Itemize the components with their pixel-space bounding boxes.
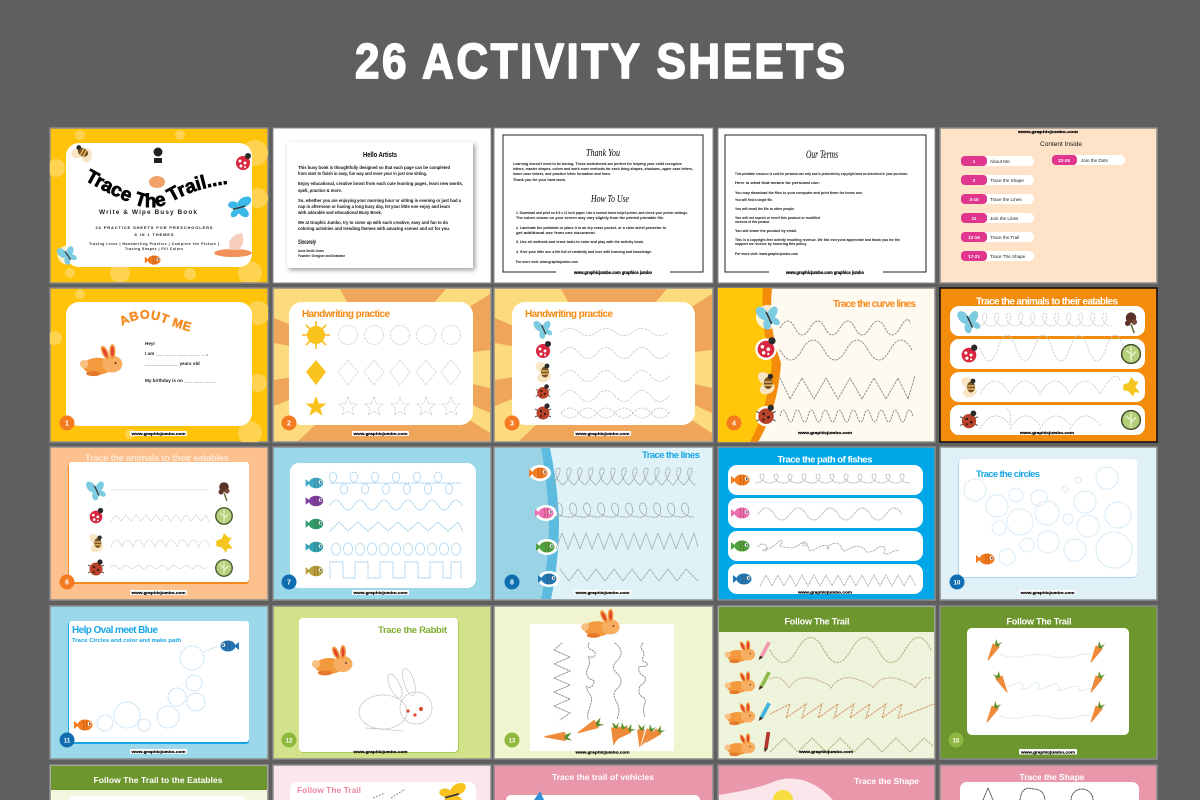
sheet 15: follow the trail carrots (940, 606, 1157, 759)
page number: 7 (287, 580, 291, 586)
heading: Follow The Trail (784, 616, 850, 626)
contents list: Trace the Lines (990, 197, 1022, 202)
thank you text: Thank you for your hard work. (513, 177, 566, 182)
footer url: www.graphicjumbo.com (352, 431, 408, 436)
letter body: from start to finish in easy, fun way and more your in just one sitting. (298, 171, 427, 176)
icon: kite (306, 360, 326, 385)
about me form: _____________ years old (144, 361, 200, 366)
contents list: Trace The Shape (990, 254, 1026, 259)
page number: 10 (954, 580, 961, 586)
footer url: www.graphicjumbo.com (352, 590, 408, 595)
sheet 6: trace animals peach (50, 447, 268, 600)
rabbit face (406, 707, 423, 717)
footer url: www.graphicjumbo.com (574, 750, 630, 754)
footer url: www.graphicjumbo.com graphics jumbo (573, 270, 652, 275)
sheet: our terms (718, 128, 935, 283)
heading: Trace the lines (642, 450, 700, 461)
vertical tracing lines (554, 643, 647, 720)
about me form (144, 341, 216, 383)
letter body: Enjoy educational, creative boost from each cute learning pages, learn new words, (298, 181, 463, 186)
letter body: Founder / Designer and Illustrator (298, 254, 346, 258)
title: 26 ACTIVITY SHEETS (355, 34, 845, 89)
icon: chick (773, 790, 793, 800)
tracing lines (770, 638, 934, 752)
page number: 1 (65, 420, 69, 428)
heading: Follow The Trail (297, 785, 361, 795)
terms text: You may download the files to your computer and print them for home use. (735, 190, 863, 195)
page number: 6 (65, 580, 69, 586)
sheet 5: trace animals orange (940, 288, 1157, 442)
footer url: www.graphicjumbo.com (130, 749, 186, 754)
about me form: I am ___ __ __ ____ __ __ __, (145, 351, 208, 356)
letter body: spell, practice & more. (298, 188, 342, 193)
page number: 12 (286, 738, 293, 744)
about me form: Hey! (145, 341, 155, 346)
sheet 12: trace the rabbit (273, 606, 491, 759)
page number (504, 416, 520, 430)
tracing lines (756, 474, 916, 586)
letter body: with adorable and educational Busy Book. (297, 210, 382, 215)
page number: 3 (510, 420, 514, 428)
fish icons (306, 475, 326, 579)
how to use text: For more visit: www.graphicjumbo.com (516, 259, 578, 264)
rows (950, 306, 1145, 435)
footer url: www.graphicjumbo.com (798, 750, 853, 754)
how to use text: 2. Laminate the printable or place it in an dry erase pocket, or a clear sheet protector to (516, 225, 667, 230)
page number (60, 416, 74, 430)
fish icons (74, 638, 239, 733)
tracing lines (552, 468, 698, 581)
contents heading: Content Inside (1040, 141, 1082, 148)
fish icon (976, 551, 998, 567)
sheet 13: rabbit to carrots (494, 606, 713, 759)
cover stickers (53, 140, 256, 268)
footer url (556, 268, 670, 276)
sheet 7: blue fish lines (273, 447, 491, 600)
sheet: trace the shape (940, 765, 1157, 800)
icon: sun (302, 321, 330, 349)
heading: Help Oval meet Blue (72, 625, 158, 636)
footer url (769, 268, 883, 276)
vehicle icon (534, 791, 544, 800)
contents list: Trace the Shape (990, 178, 1024, 183)
sheet 2: handwriting shapes (273, 288, 491, 442)
animals and food (83, 475, 233, 578)
contents list: Join the Lines (990, 216, 1019, 221)
terms heading: Our Terms (806, 149, 838, 161)
rows (728, 465, 923, 594)
cover logo (154, 148, 162, 163)
letter body: We at Graphic Jumbo, try to come up with such creative, easy and fun to do (298, 220, 448, 225)
page number (60, 732, 74, 748)
footer url: www.graphicjumbo.com (352, 749, 408, 754)
cover details: Tracing Shapes | Fill Colors (125, 247, 183, 251)
sheet 11: help oval meet blue (50, 606, 268, 759)
thank you text: letters, master shapes, colors and work more methods for each thing shapes, shadows, upper case letters, (513, 166, 693, 171)
page number: 2 (287, 420, 291, 428)
carrots (545, 712, 666, 751)
page number (282, 732, 296, 748)
sheet: hello artists (273, 128, 491, 283)
terms text: versions of this product. (735, 219, 770, 224)
sheet 9: path of fishes (718, 447, 935, 600)
icon: butterfly (437, 779, 471, 800)
sheet 3: handwriting lines (494, 288, 713, 442)
contents list: 1 (973, 159, 976, 164)
rabbit (581, 609, 620, 638)
footer url: www.graphicjumbo.com (797, 430, 853, 435)
page number: 11 (64, 738, 71, 744)
footer url: www.graphicjumbo.com (574, 431, 630, 436)
footer url: www.graphicjumbo.com (1020, 749, 1076, 754)
tracing lines (330, 472, 463, 578)
letter body (297, 165, 463, 258)
tracing shapes (338, 326, 461, 415)
rabbit (312, 645, 352, 676)
heading: Trace the circles (976, 469, 1040, 480)
sheet: follow the trail to the eatables (50, 765, 268, 800)
page number (60, 574, 74, 590)
page number (282, 416, 296, 430)
terms text: support we receive by honoring this policy. (735, 241, 807, 246)
contents list: 12-16 (968, 235, 980, 240)
page number (504, 732, 520, 748)
tracing lines (980, 313, 1124, 429)
panel (506, 795, 700, 800)
how to use text: The colors shown on your screen may vary slightly from the printed printable file. (516, 215, 664, 220)
sheet: thank you and how to use (494, 128, 713, 283)
thank you text (513, 161, 693, 182)
page number: 4 (732, 420, 736, 428)
letter body: Anne Smith Jones (298, 249, 324, 253)
panel (68, 796, 247, 800)
heading: Handwriting practice (525, 309, 613, 320)
sheet 4: trace the curve lines (718, 288, 935, 442)
page number (504, 574, 520, 590)
contents list: 11 (972, 216, 977, 221)
dashed butterfly (373, 789, 405, 798)
tracing circles (964, 467, 1132, 568)
thank you text: lower case letters, and practice letter formation and lines. (513, 171, 611, 176)
terms text: This is a copyright-free activity resulting revenue. We like everyone appreciate and thank you for the (735, 237, 901, 242)
page number (950, 574, 964, 590)
insect icons (530, 315, 556, 422)
contents list (961, 155, 1125, 261)
rabbits and pencils (725, 640, 776, 756)
letter body: So, whether you are enjoying your morning hour or sitting in evening or just had a (298, 198, 462, 203)
terms text: You will email the file to other people. (735, 206, 795, 211)
cover details: Tracing Lines | Handwriting Practice | Complete the Picture | (89, 242, 219, 246)
how to use text: 1. Download and print on 8.5 x 11 inch paper. Use a normal home inkjet printer, and check your printer settings. (516, 210, 688, 215)
how to use heading: How To Use (590, 193, 629, 205)
footer url: www.graphicjumbo.com (574, 590, 630, 595)
cover subtitle: Write & Wipe Busy Book (99, 209, 197, 216)
heading: Trace the curve lines (833, 299, 916, 310)
top url: www.graphicjumbo.com (1017, 130, 1078, 134)
sheet: cover (49, 127, 269, 284)
about me form: My birthday is on ___ ____ __ __ (145, 378, 216, 383)
letter body: This busy book is thoughtfully designed so that each page can be completed (298, 165, 450, 170)
how to use text: 4. Give your little one a life full of creativity and love with learning and knowledge. (516, 249, 652, 254)
tracing circles (97, 646, 218, 731)
contents list: Trace the Trail (990, 235, 1019, 240)
thank you text: Learning doesn't need to be boring. These worksheets are perfect for helping your child recognize (513, 161, 683, 166)
page number: 8 (510, 580, 514, 586)
sheet 14: follow the trail pencils (718, 606, 935, 759)
cover details: 8 IN 1 THEMES (134, 232, 174, 237)
contents list: About Me (990, 159, 1010, 164)
insect icons (752, 299, 785, 426)
how to use text (516, 210, 688, 264)
heading: Trace the Rabbit (378, 625, 448, 636)
footer url: www.graphicjumbo.com (1019, 431, 1074, 435)
how to use text: 3. Use all methods and erase tools to color and play with the activity book. (516, 239, 644, 244)
fish icons (731, 472, 755, 587)
terms text (735, 171, 908, 256)
page number: 15 (953, 738, 960, 744)
sheet: content inside (940, 128, 1157, 283)
page number (282, 574, 296, 590)
rabbit (80, 344, 122, 376)
terms text: You will share the product by email. (735, 228, 797, 233)
terms text: You will find a single file. (735, 197, 773, 202)
footer url: www.graphicjumbo.com (797, 590, 853, 594)
tracing lines (1000, 654, 1091, 718)
terms text: Here is what that means for personal use: (735, 180, 820, 185)
sheet 10: trace the circles (940, 447, 1157, 600)
how to use text: get additional use from one document. (516, 230, 596, 235)
thank you heading: Thank You (586, 147, 620, 159)
letter heading: Hello Artists (363, 152, 397, 159)
sheet: trace the shape chick (718, 765, 935, 800)
page number (948, 732, 964, 748)
tracing lines (561, 328, 669, 418)
terms text: For more visit: www.graphicjumbo.com (735, 251, 798, 256)
letter body: coloring activities and trending themes with amazing scenes and art for you. (298, 226, 450, 231)
animals and food (953, 304, 1140, 430)
dashed rabbit (359, 667, 432, 731)
icon: star (306, 396, 326, 416)
subheading: Trace Circles and color and make path (72, 638, 182, 644)
letter body: Sincerely (298, 240, 316, 246)
heading: Trace the Shape (854, 776, 919, 786)
sheet 8: trace the lines (494, 447, 713, 600)
tracing lines (780, 319, 915, 422)
fish icons (529, 465, 560, 587)
heading: Trace the path of fishes (778, 454, 872, 466)
sheet: follow the trail butterflies (273, 765, 491, 800)
about me heading: ABOUT ME (121, 310, 192, 332)
contents list: 2 (973, 178, 976, 183)
heading: Handwriting practice (302, 309, 390, 320)
activity sheets grid (49, 127, 1158, 800)
footer url: www.graphicjumbo.com (1019, 590, 1075, 595)
letter body: nap in afternoon or having a long busy day, let your little one enjoy and learn (298, 204, 450, 209)
contents list: Join the Dots (1081, 158, 1109, 163)
footer url: www.graphicjumbo.com graphics jumbo (785, 270, 864, 275)
sheet: trace the trail of vehicles (494, 765, 713, 800)
cover details (89, 225, 219, 251)
carrots (987, 639, 1105, 722)
terms text: This printable resource is sold for personal use only and is protected by copyright laws as described in your purchase. (735, 171, 908, 176)
cover details: 26 PRACTICE SHEETS FOR PRESCHOOLERS (96, 225, 213, 230)
terms text: You will not reprint or resell this product or modified (735, 215, 820, 220)
contents list: 17-21 (968, 254, 980, 259)
page number (726, 416, 742, 430)
contents list: 3-10 (969, 197, 979, 202)
heading: Trace the Shape (1020, 772, 1085, 782)
page number: 13 (509, 738, 516, 744)
heading: Trace the animals to their eatables (976, 296, 1118, 308)
footer url: www.graphicjumbo.com (130, 431, 186, 436)
heading: Follow The Trail to the Eatables (94, 775, 223, 785)
heading: Follow The Trail (1006, 616, 1072, 626)
tracing lines (111, 490, 210, 568)
cover title: Trace The Trail.... (88, 168, 228, 208)
footer url: www.graphicjumbo.com (130, 590, 186, 595)
heading: Trace the animals to their eatables (85, 453, 229, 464)
contents list: 22-26 (1058, 158, 1070, 163)
sheet 1: about me (49, 287, 269, 443)
dashed shapes (983, 788, 1093, 800)
heading: Trace the trail of vehicles (552, 772, 654, 782)
